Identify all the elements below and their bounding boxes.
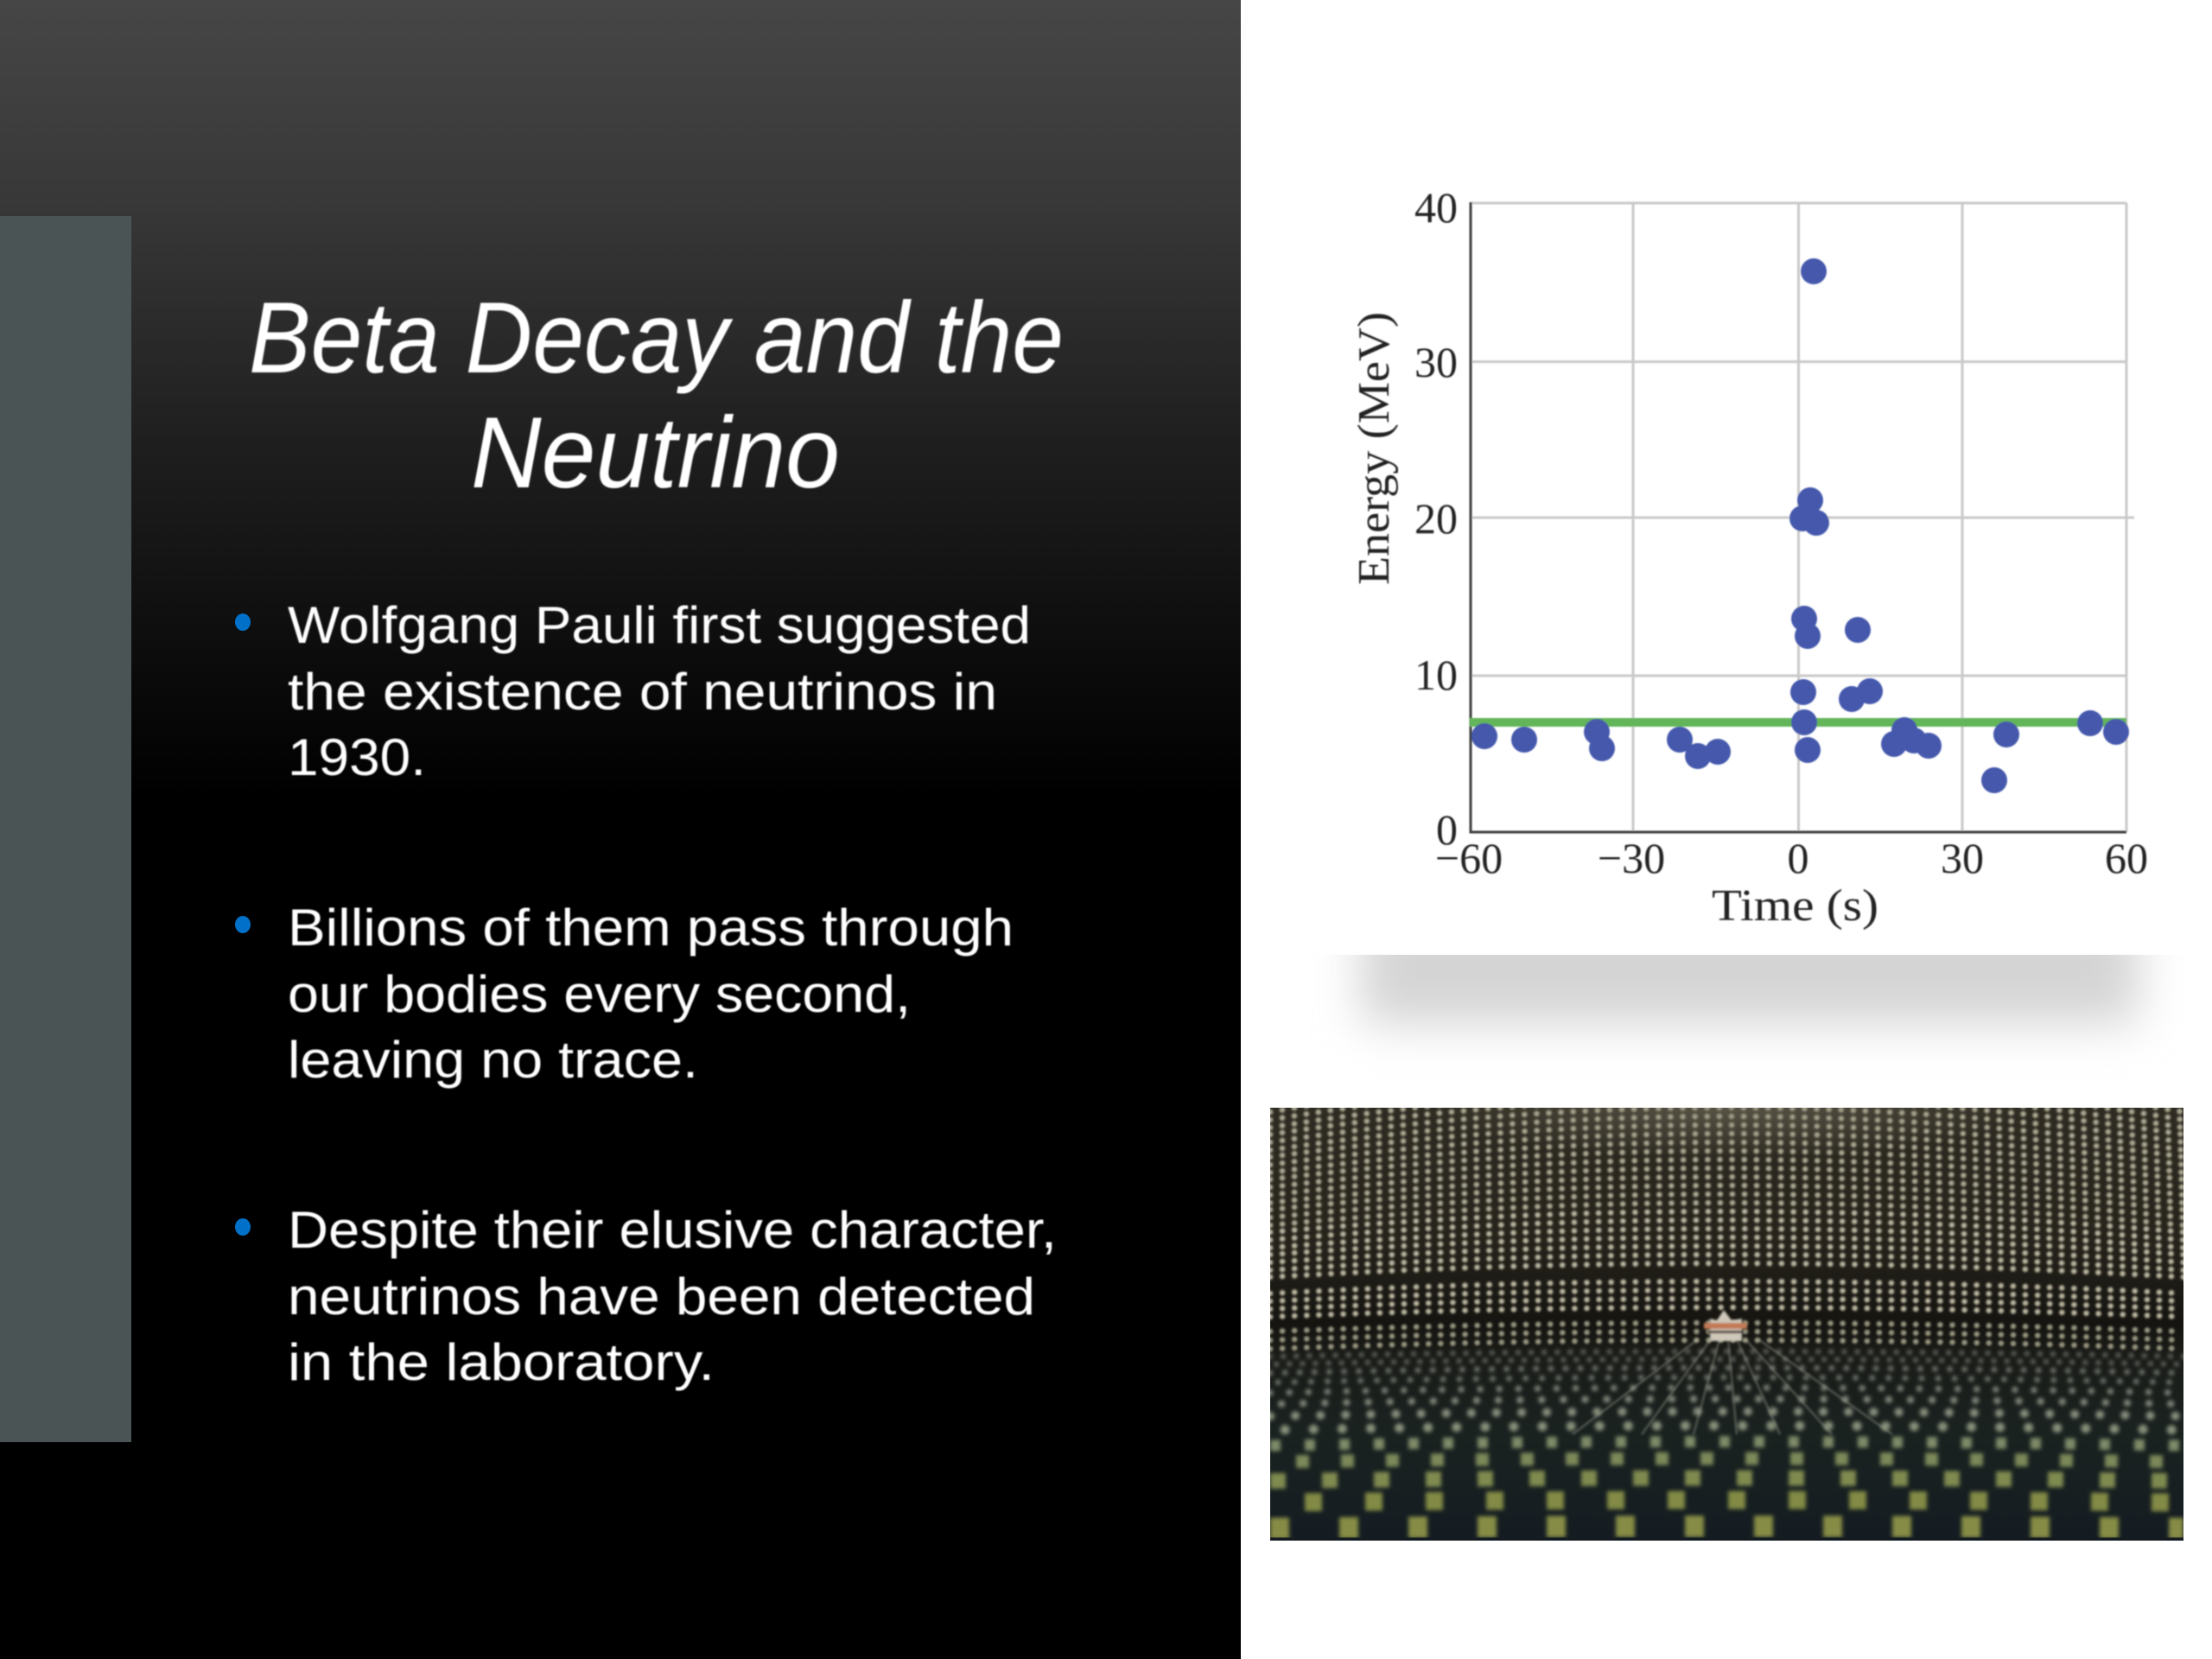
- bullet 3: [235, 1201, 1057, 1391]
- bullet 1: 1930.: [288, 728, 426, 786]
- y axis title: Energy (MeV): [1350, 312, 1399, 585]
- y axis tick labels: 30: [1414, 338, 1458, 386]
- x axis tick labels: [1435, 834, 2148, 882]
- x axis tick labels: 60: [2105, 834, 2148, 882]
- y axis tick labels: 0: [1436, 805, 1458, 854]
- floor photomultiplier rows: [1270, 1351, 2183, 1529]
- grid lines: [1470, 203, 2134, 832]
- photo: neutrino detector interior: [1270, 1073, 2183, 1541]
- y axis tick labels: 40: [1414, 183, 1458, 232]
- bullet 2: leaving no trace.: [288, 1031, 698, 1089]
- boat with researchers: [1704, 1310, 1747, 1341]
- x axis tick labels: −30: [1598, 834, 1665, 882]
- bullet 1: [235, 596, 1031, 786]
- converging light streaks: [1573, 1339, 1892, 1434]
- data points: [1471, 258, 2129, 793]
- x axis title: Time (s): [1712, 881, 1878, 931]
- bright ceiling glow: [1491, 1108, 1970, 1149]
- threshold line: [1470, 718, 2126, 727]
- chart shadow: [1342, 955, 2158, 1044]
- bullet 1: the existence of neutrinos in: [288, 663, 997, 721]
- bullet 3: in the laboratory.: [288, 1333, 715, 1391]
- panel: dark background: [0, 0, 1241, 1659]
- y axis tick labels: 10: [1414, 651, 1458, 699]
- x axis tick labels: 30: [1941, 834, 1984, 882]
- title: [249, 281, 1064, 509]
- x axis tick labels: 0: [1787, 834, 1809, 882]
- bullet 3: neutrinos have been detected: [288, 1268, 1035, 1325]
- bullet 2: Billions of them pass through: [288, 899, 1014, 957]
- bullet list: [235, 596, 1057, 1391]
- scatter chart: energy vs time: [1350, 183, 2148, 931]
- y axis tick labels: [1414, 183, 1458, 854]
- vertical cables on floor: [1270, 1352, 2183, 1430]
- photo base: [1270, 1108, 2183, 1541]
- bullet 2: [235, 899, 1014, 1089]
- panel: left accent bar: [0, 216, 131, 1442]
- y axis tick labels: 20: [1414, 494, 1458, 543]
- title: Neutrino: [471, 396, 840, 509]
- title: Beta Decay and the: [249, 281, 1064, 394]
- x axis tick labels: −60: [1435, 834, 1503, 882]
- axes: [1471, 202, 2126, 832]
- bullet 1: Wolfgang Pauli first suggested: [288, 596, 1031, 654]
- wall photomultiplier rows: [1270, 1108, 2183, 1353]
- bullet 2: our bodies every second,: [288, 965, 911, 1023]
- bullet 3: Despite their elusive character,: [288, 1201, 1057, 1259]
